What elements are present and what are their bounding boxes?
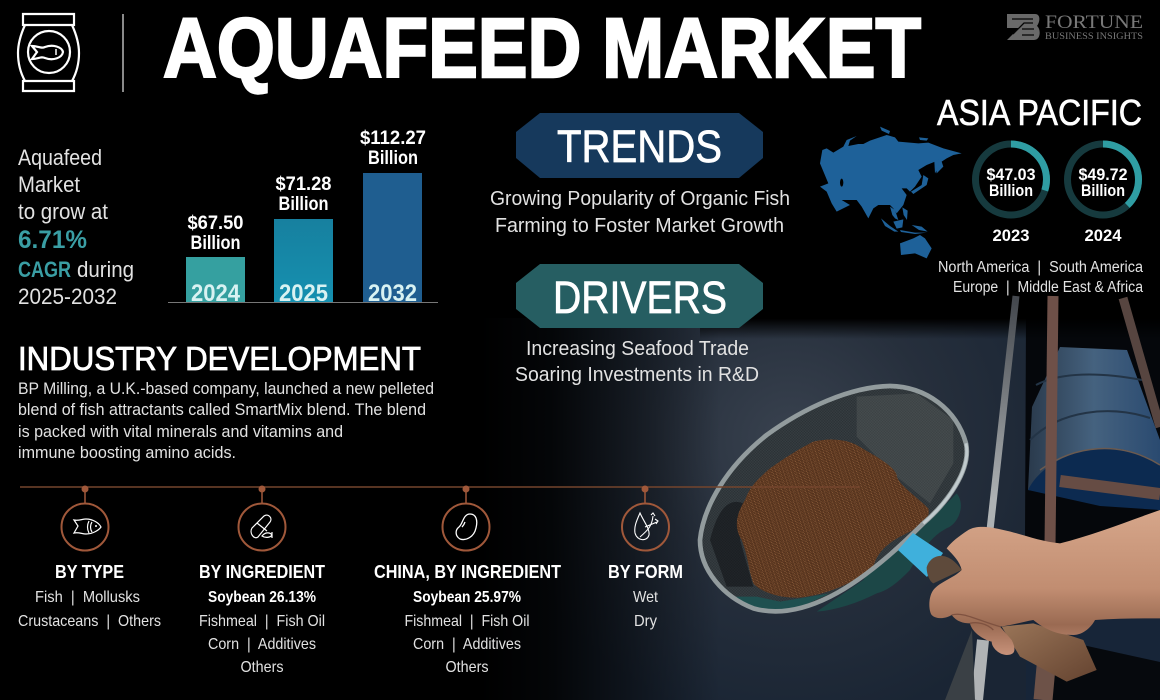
text block: industry development: blend of fish attractants called SmartMix blend. The blend xyxy=(18,400,426,419)
segment: by type: Fish | Mollusks xyxy=(35,589,140,606)
icon: capsule and fish xyxy=(238,486,286,550)
text block: industry development: is packed with vital minerals and vitamins and xyxy=(18,422,343,441)
photo detail: barrel xyxy=(1025,318,1160,700)
photo: net of feed pellets held over a tank xyxy=(480,296,1160,700)
donut: 2024: 2024 xyxy=(1084,226,1122,245)
donut: 2024 xyxy=(1068,144,1138,245)
text block: CAGR statement: 6.71% xyxy=(18,226,87,254)
text block: CAGR statement: Market xyxy=(18,172,80,197)
text block: CAGR statement: Aquafeed xyxy=(18,145,102,170)
photo detail: handle grip xyxy=(927,556,962,583)
segment: by form: Dry xyxy=(634,613,657,630)
donut: 2023 xyxy=(976,144,1046,245)
panel: drivers: Increasing Seafood Trade xyxy=(526,338,749,360)
segment: China by ingredient: Soybean 25.97% xyxy=(413,589,521,606)
photo detail: wooden handle xyxy=(1002,623,1097,682)
photo detail: hand xyxy=(929,510,1160,655)
text block: CAGR statement: during xyxy=(77,257,134,282)
bar 2025: 2025 xyxy=(279,280,328,307)
segment: China by ingredient: CHINA, BY INGREDIENT xyxy=(374,562,561,582)
icon: feed bag with fish xyxy=(18,14,79,91)
title: AQUAFEED MARKET xyxy=(163,1,921,95)
photo detail: net rim xyxy=(700,386,967,611)
bar chart: market size xyxy=(168,128,438,307)
photo detail: green net underside xyxy=(817,493,961,612)
panel: Asia Pacific xyxy=(820,92,1143,296)
bar 2025 xyxy=(274,174,333,307)
panel: trends: Growing Popularity of Organic Fish xyxy=(490,188,790,210)
panel: drivers xyxy=(515,264,763,386)
segment: by ingredient: BY INGREDIENT xyxy=(199,562,325,582)
panel: trends: Farming to Foster Market Growth xyxy=(495,215,784,237)
icon: drop with arrows xyxy=(622,486,669,550)
donut: 2023: Billion xyxy=(989,181,1033,200)
segment: by form: BY FORM xyxy=(608,562,683,582)
logo: Fortune Business Insights: BUSINESS INSIGHTS xyxy=(1045,32,1143,42)
segment: China by ingredient: Fishmeal | Fish Oil xyxy=(404,613,530,630)
map: Asia Pacific xyxy=(820,127,962,258)
photo detail: blue handle tape xyxy=(898,533,943,577)
photo detail: feed pellets xyxy=(737,439,929,598)
segment: by type: Crustaceans | Others xyxy=(18,613,161,630)
bar 2024: Billion xyxy=(190,233,240,254)
photo detail: net mesh xyxy=(700,386,967,611)
panel: trends: TRENDS xyxy=(557,121,722,172)
text block: CAGR statement: to grow at xyxy=(18,199,108,224)
donut: 2023: $47.03 xyxy=(986,165,1036,184)
bar 2024: 2024 xyxy=(191,280,241,307)
text block: industry development xyxy=(18,379,434,462)
segment: China by ingredient: Others xyxy=(446,659,488,676)
photo detail: tank poles xyxy=(945,296,1160,700)
panel: drivers: Soaring Investments in R&D xyxy=(515,364,759,386)
bar 2032: $112.27 xyxy=(360,128,426,149)
segment: by ingredient: Fishmeal | Fish Oil xyxy=(199,613,325,630)
text block: CAGR statement xyxy=(18,145,134,309)
segment: China by ingredient xyxy=(374,486,561,676)
bar 2032 xyxy=(360,128,426,307)
divider xyxy=(122,14,124,92)
logo: Fortune Business Insights xyxy=(1007,12,1143,42)
panel: trends xyxy=(490,113,790,237)
text block: other regions: Europe | Middle East & Africa xyxy=(953,279,1143,296)
donut: 2024: $49.72 xyxy=(1078,165,1128,184)
logo: Fortune Business Insights: FORTUNE xyxy=(1045,12,1143,33)
heading: Asia Pacific: ASIA PACIFIC xyxy=(937,92,1142,133)
segment: by ingredient: Corn | Additives xyxy=(208,636,316,653)
donut: 2024: Billion xyxy=(1081,181,1125,200)
segment: by ingredient xyxy=(199,486,325,676)
text block: industry development: BP Milling, a U.K.-based company, launched a new pelleted xyxy=(18,379,434,398)
timeline line xyxy=(20,486,860,488)
segment: by type xyxy=(18,486,161,630)
segment: by form: Wet xyxy=(633,589,658,606)
bar 2025: Billion xyxy=(278,194,328,215)
segment: by type: BY TYPE xyxy=(55,562,124,582)
bar 2024 xyxy=(186,213,245,307)
segment: by ingredient: Others xyxy=(240,659,284,676)
heading: industry development: INDUSTRY DEVELOPMENT xyxy=(18,340,421,377)
donut: 2023: 2023 xyxy=(992,226,1030,245)
bar 2032: 2032 xyxy=(368,280,417,307)
text block: other regions: North America | South America xyxy=(938,259,1143,276)
text block: industry development: immune boosting amino acids. xyxy=(18,443,236,462)
segment: China by ingredient: Corn | Additives xyxy=(413,636,521,653)
panel: drivers: DRIVERS xyxy=(553,272,727,323)
text block: CAGR statement: CAGR xyxy=(18,257,71,282)
icon: soybean xyxy=(442,486,490,550)
bar 2024: $67.50 xyxy=(188,213,244,234)
text block: CAGR statement: 2025-2032 xyxy=(18,284,117,309)
bar 2025: $71.28 xyxy=(276,174,332,195)
bar 2032: Billion xyxy=(368,148,418,169)
icon: fish xyxy=(62,486,108,550)
text block: other regions xyxy=(938,259,1143,296)
segment: by ingredient: Soybean 26.13% xyxy=(208,589,316,606)
segment: by form xyxy=(608,486,683,630)
